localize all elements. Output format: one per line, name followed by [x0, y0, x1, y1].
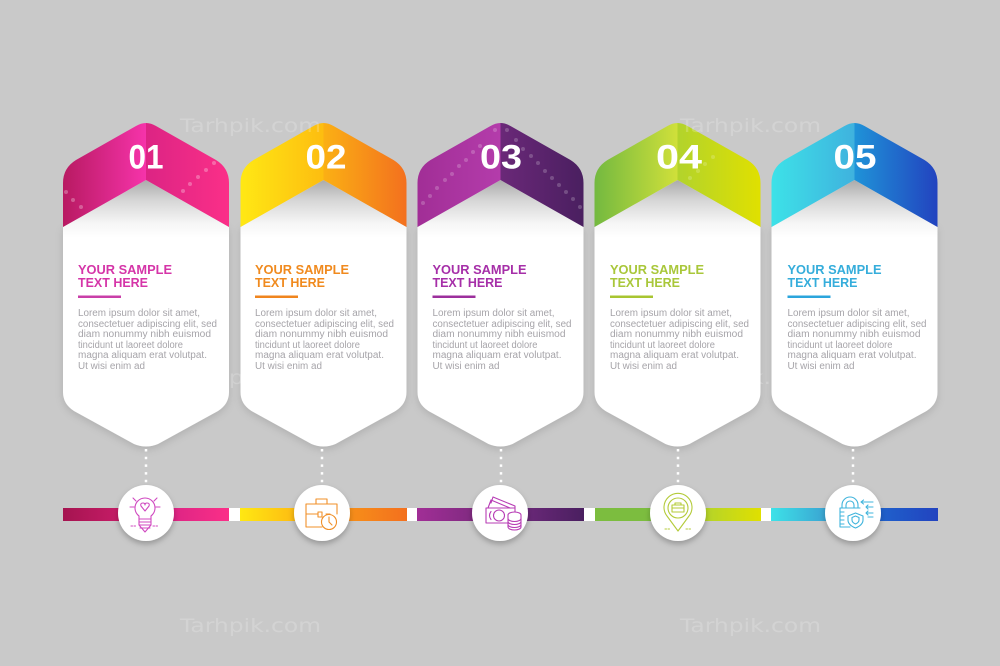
panel: step 01 [63, 123, 229, 446]
heading 03: YOUR SAMPLE [432, 263, 526, 277]
watermark text: Tarhpik.com [679, 615, 821, 637]
body text 04: diam nonummy nibh euismod [610, 329, 743, 340]
number 05: 05 [834, 138, 876, 176]
underline 01 [78, 296, 121, 298]
body text 01: diam nonummy nibh euismod [78, 329, 211, 340]
ribbon 02 [240, 123, 406, 227]
body text 03: Ut wisi enim ad [432, 361, 500, 372]
number 01: 01 [128, 138, 164, 176]
fold shadow 03 [418, 180, 584, 238]
underline 05 [788, 296, 830, 298]
ribbon 01 [63, 123, 229, 227]
body text 01: magna aliquam erat volutpat. [78, 350, 207, 361]
heading 05: YOUR SAMPLE [788, 263, 882, 277]
heading 02: TEXT HERE [255, 276, 325, 290]
card body 05 [772, 180, 938, 446]
icon: padlock with shield [825, 485, 881, 541]
heading 02: YOUR SAMPLE [255, 263, 349, 277]
ribbon 03 [418, 123, 584, 227]
fold shadow 02 [240, 180, 406, 238]
panel: step 05 [772, 123, 938, 446]
dotted connectors [146, 449, 853, 486]
number 02: 02 [306, 138, 346, 176]
timeline bar [63, 508, 938, 521]
body text 02: tincidunt ut laoreet dolore [255, 340, 361, 351]
body text 04: Ut wisi enim ad [610, 361, 677, 372]
body text 05: diam nonummy nibh euismod [788, 329, 920, 340]
underline 03 [432, 296, 476, 298]
body text 02: diam nonummy nibh euismod [255, 329, 388, 340]
body text 03: magna aliquam erat volutpat. [432, 350, 562, 361]
heading 01: TEXT HERE [78, 276, 148, 290]
watermark text: Tarhpik.com [179, 615, 321, 637]
panel: step 02 [240, 123, 406, 446]
body text 04: consectetuer adipiscing elit, sed [610, 319, 749, 330]
ribbon 04 [594, 123, 760, 227]
heading 05: TEXT HERE [788, 276, 858, 290]
number 04: 04 [656, 138, 702, 176]
watermark text: Tarhpik.com [179, 115, 321, 137]
body text 05: consectetuer adipiscing elit, sed [788, 319, 926, 330]
card body 04 [594, 180, 760, 446]
body text 02: Lorem ipsum dolor sit amet, [255, 308, 377, 319]
body text 02: magna aliquam erat volutpat. [255, 350, 384, 361]
fold shadow 04 [594, 180, 760, 238]
icon: light bulb [118, 485, 174, 541]
underline 04 [610, 296, 653, 298]
watermark text: Tarhpik.com [179, 367, 321, 389]
body text 01: Ut wisi enim ad [78, 361, 145, 372]
heading 04: YOUR SAMPLE [610, 263, 704, 277]
watermark text: Tarhpik.com [679, 367, 821, 389]
number 03: 03 [480, 138, 522, 176]
body text 03: consectetuer adipiscing elit, sed [432, 319, 572, 330]
body text 04: Lorem ipsum dolor sit amet, [610, 308, 732, 319]
heading 01: YOUR SAMPLE [78, 263, 172, 277]
body text 03: diam nonummy nibh euismod [432, 329, 566, 340]
icon: location pin with briefcase [650, 485, 706, 541]
watermark text: Tarhpik.com [679, 115, 821, 137]
body text 02: consectetuer adipiscing elit, sed [255, 319, 394, 330]
card body 03 [418, 180, 584, 446]
body text 04: tincidunt ut laoreet dolore [610, 340, 716, 351]
body text 01: Lorem ipsum dolor sit amet, [78, 308, 200, 319]
heading 04: TEXT HERE [610, 276, 680, 290]
body text 02: Ut wisi enim ad [255, 361, 322, 372]
ribbon 05 [772, 123, 938, 227]
body text 03: Lorem ipsum dolor sit amet, [432, 308, 554, 319]
body text 05: Ut wisi enim ad [788, 361, 854, 372]
fold shadow 01 [63, 180, 229, 238]
body text 03: tincidunt ut laoreet dolore [432, 340, 538, 351]
fold shadow 05 [772, 180, 938, 238]
card body 02 [240, 180, 406, 446]
icon: briefcase and clock [294, 485, 350, 541]
body text 05: tincidunt ut laoreet dolore [788, 340, 893, 351]
body text 05: Lorem ipsum dolor sit amet, [788, 308, 910, 319]
icon: cash and coins [472, 485, 528, 541]
watermark text [179, 115, 821, 637]
card body 01 [63, 180, 229, 446]
body text 05: magna aliquam erat volutpat. [788, 350, 916, 361]
heading 03: TEXT HERE [432, 276, 502, 290]
body text 04: magna aliquam erat volutpat. [610, 350, 739, 361]
body text 01: consectetuer adipiscing elit, sed [78, 319, 217, 330]
panel: step 04 [594, 123, 760, 446]
underline 02 [255, 296, 298, 298]
body text 01: tincidunt ut laoreet dolore [78, 340, 184, 351]
panel: step 03 [418, 123, 584, 446]
